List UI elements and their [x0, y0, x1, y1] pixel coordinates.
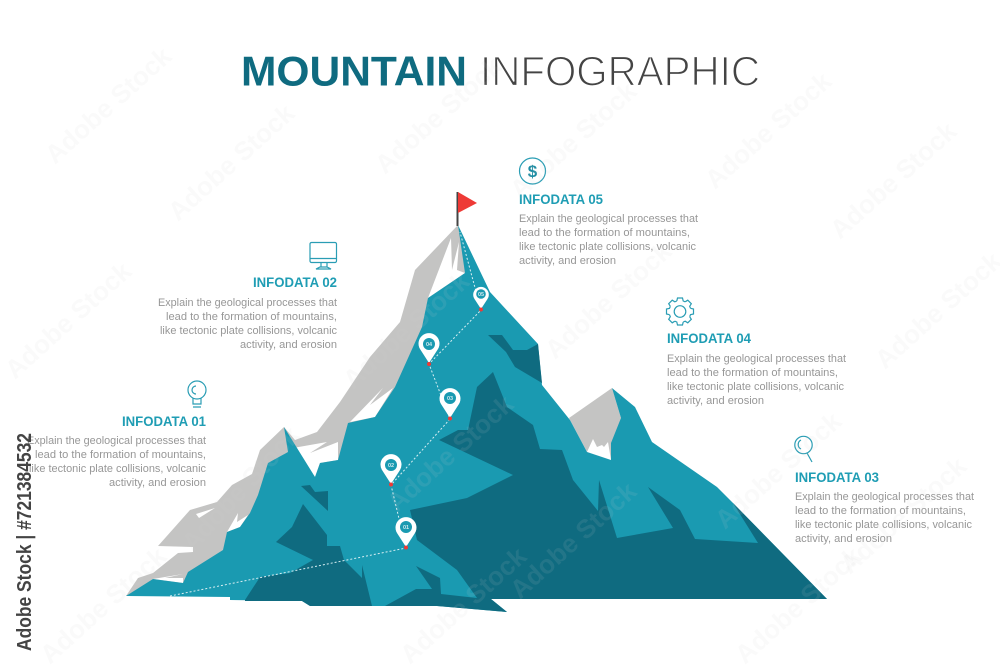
block: infodata 01: INFODATA 01	[122, 414, 206, 429]
watermark text: Adobe Stock	[162, 97, 301, 226]
block: infodata 05	[519, 158, 698, 267]
block: infodata 01: Explain the geological processes that	[27, 435, 206, 447]
pin 01	[396, 517, 416, 550]
block: infodata 02: activity, and erosion	[240, 339, 337, 351]
title: INFOGRAPHIC	[480, 48, 760, 94]
watermark text: Adobe Stock	[39, 40, 178, 169]
block: infodata 05: lead to the formation of mountains,	[519, 227, 690, 239]
block: infodata 01: like tectonic plate collisions, volcanic	[29, 463, 207, 475]
block: infodata 02: Explain the geological processes that	[158, 297, 337, 309]
block: infodata 05: like tectonic plate collisions, volcanic	[519, 241, 697, 253]
watermark text: Adobe Stock	[0, 255, 138, 384]
block: infodata 03: lead to the formation of mountains,	[795, 505, 966, 517]
title	[241, 48, 760, 94]
watermark text: Adobe Stock	[175, 420, 306, 557]
title: MOUNTAIN	[241, 48, 467, 94]
watermark text: Adobe Stock	[824, 115, 963, 244]
block: infodata 04: like tectonic plate collisions, volcanic	[667, 381, 845, 393]
dotted route	[170, 232, 481, 596]
block: infodata 01	[27, 381, 207, 489]
icon: dollar	[520, 158, 546, 184]
watermark text: Adobe Stock	[369, 50, 508, 179]
block: infodata 04: Explain the geological processes that	[667, 353, 846, 365]
block: infodata 05: INFODATA 05	[519, 192, 603, 207]
icon: monitor	[310, 242, 336, 269]
block: infodata 05: activity, and erosion	[519, 255, 616, 267]
stock id label: Adobe Stock | #721384532	[14, 433, 36, 651]
grey rock faces	[126, 225, 621, 596]
dark teal shaded faces	[245, 335, 827, 612]
pin 05: 05	[478, 292, 484, 298]
icon: light bulb	[188, 381, 206, 407]
block: infodata 03	[795, 436, 974, 545]
block: infodata 01: lead to the formation of mountains,	[35, 449, 206, 461]
pin 04	[418, 333, 440, 366]
snow patches	[153, 238, 611, 583]
icon: magnifier	[795, 436, 812, 462]
pin 03: 03	[447, 396, 453, 402]
watermark text: Adobe Stock	[504, 475, 643, 604]
watermark text: Adobe Stock	[834, 450, 973, 579]
block: infodata 02: INFODATA 02	[253, 275, 337, 290]
block: infodata 02	[158, 242, 338, 351]
icon: dollar: $	[528, 162, 538, 181]
block: infodata 03: activity, and erosion	[795, 533, 892, 545]
block: infodata 04: INFODATA 04	[667, 331, 751, 346]
watermark text: Adobe Stock	[337, 265, 476, 394]
block: infodata 03: INFODATA 03	[795, 470, 879, 485]
block: infodata 02: lead to the formation of mountains,	[166, 311, 337, 323]
block: infodata 03: Explain the geological processes that	[795, 491, 974, 503]
pin 04: 04	[426, 342, 433, 348]
pin 02	[381, 454, 402, 486]
watermark text: Adobe Stock	[539, 235, 678, 364]
block: infodata 05: Explain the geological processes that	[519, 213, 698, 225]
watermark text: Adobe Stock	[381, 388, 520, 517]
pin 02: 02	[388, 463, 394, 469]
block: infodata 02: like tectonic plate collisions, volcanic	[160, 325, 338, 337]
block: infodata 04: activity, and erosion	[667, 395, 764, 407]
watermark text: Adobe Stock	[709, 405, 848, 534]
light teal mountain body	[126, 225, 827, 612]
block: infodata 04	[666, 298, 846, 407]
block: infodata 04: lead to the formation of mountains,	[667, 367, 838, 379]
block: infodata 01: activity, and erosion	[109, 477, 206, 489]
watermark text: Adobe Stock	[699, 65, 838, 194]
watermark text: Adobe Stock	[729, 540, 868, 667]
watermark text: Adobe Stock	[394, 540, 533, 667]
pin 01: 01	[403, 525, 409, 531]
pin 05	[473, 287, 489, 312]
watermark text: Adobe Stock	[34, 540, 173, 667]
mountain illustration	[126, 192, 827, 612]
icon: gear	[666, 298, 694, 325]
block: infodata 03: like tectonic plate collisions, volcanic	[795, 519, 973, 531]
watermark text: Adobe Stock	[504, 75, 643, 204]
flag	[456, 192, 477, 226]
pin 03	[440, 388, 461, 420]
